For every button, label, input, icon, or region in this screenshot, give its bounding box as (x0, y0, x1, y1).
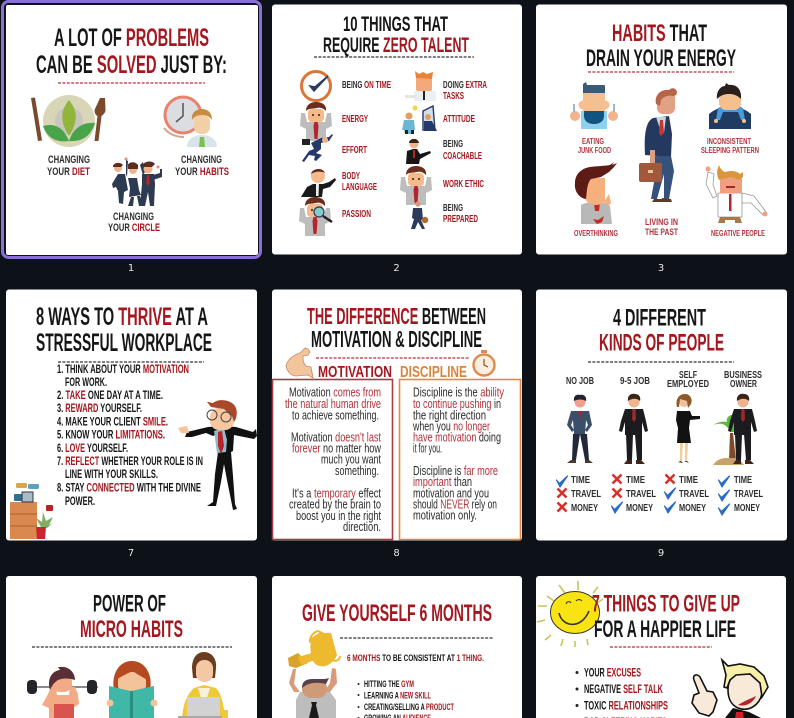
subheading: motivation: MOTIVATION (318, 364, 392, 381)
icon: clock with check (302, 72, 330, 100)
icon: clock and man (164, 97, 217, 147)
numbered list: 5. KNOW YOUR LIMITATIONS. (57, 428, 165, 442)
numbered list (57, 362, 203, 508)
icon: flexed arm (286, 348, 313, 378)
checklist: 9-5 job: MONEY (626, 503, 653, 514)
item: effort: EFFORT (342, 145, 367, 156)
numbered list: POWER. (65, 494, 95, 508)
subheading: 6 MONTHS TO BE CONSISTENT AT 1 THING. (347, 653, 484, 664)
panel 10: power of micro habits (6, 576, 257, 718)
box: motivation text: much you want (321, 451, 381, 466)
numbered list: 7. REFLECT WHETHER YOUR ROLE IS IN (57, 454, 203, 468)
figure: no job (567, 395, 593, 463)
caption: changing your circle (108, 211, 160, 234)
box: motivation text: to achieve something. (292, 407, 379, 422)
panel 12: seven things to give up (536, 576, 786, 718)
caption: changing your diet: CHANGING (48, 154, 90, 166)
box: discipline text: the right direction (413, 407, 486, 422)
box: motivation text: forever no matter how (292, 441, 381, 456)
figure: palm tree (713, 415, 744, 465)
icon: negative people (706, 165, 768, 223)
bullet list: TOXIC RELATIONSHIPS (584, 698, 668, 712)
box: motivation text: boost you in the right (296, 508, 381, 523)
panel 2: ten things that require zero talent (272, 4, 522, 254)
heading: 4 DIFFERENT (613, 305, 706, 332)
caption: changing your circle: CHANGING (113, 211, 154, 223)
page number 8: 8 (393, 548, 400, 559)
box: motivation text: It's a temporary effect (292, 485, 381, 500)
heading (592, 591, 740, 643)
box: motivation text: Motivation doesn't last (291, 429, 381, 444)
caption: overthinking: OVERTHINKING (574, 228, 618, 238)
checklist: no job (556, 475, 601, 514)
heading: 10 THINGS THAT (343, 13, 448, 36)
numbered list: 6. LOVE YOURSELF. (57, 441, 128, 455)
bullet list: NEGATIVE SELF TALK (584, 682, 663, 696)
caption: inconsistent sleeping pattern: SLEEPING PATTERN (701, 146, 759, 155)
numbered list: 4. MAKE YOUR CLIENT SMILE. (57, 414, 168, 428)
icon: extra tasks (405, 71, 436, 101)
heading (586, 20, 736, 72)
caption: changing your habits: YOUR HABITS (175, 166, 229, 178)
box: discipline text: motivation and you (413, 485, 489, 500)
numbered list: LINE WITH YOUR SKILLS. (65, 467, 158, 481)
icon: prepared man (411, 201, 428, 229)
box: motivation text: Motivation comes from (289, 385, 381, 400)
icon: businessman with glasses (178, 400, 257, 510)
item: body language: BODY (342, 171, 360, 182)
item: being prepared (443, 203, 478, 225)
item: work ethic: WORK ETHIC (443, 179, 484, 190)
checklist: business owner: TIME (734, 475, 752, 486)
box: discipline text: it for you. (413, 441, 442, 456)
caption: negative people: NEGATIVE PEOPLE (711, 228, 765, 238)
caption: changing your diet (47, 154, 90, 178)
item: attitude: ATTITUDE (443, 114, 475, 125)
numbered list: 1. THINK ABOUT YOUR MOTIVATION (57, 362, 189, 376)
caption: inconsistent sleeping pattern: INCONSISTENT (707, 137, 751, 146)
checklist: no job: TRAVEL (571, 489, 601, 500)
icon: man holding trophy (288, 631, 340, 718)
bullet list: LEARNING A NEW SKILL (364, 690, 431, 700)
column headers (566, 370, 762, 390)
page number 3: 3 (658, 263, 664, 274)
bullet list (358, 679, 454, 718)
column headers: BUSINESS (724, 370, 762, 381)
checklist: 9-5 job (612, 474, 656, 514)
subheading: discipline: DISCIPLINE (400, 364, 467, 381)
checklist: self employed: TIME (679, 475, 698, 486)
icon: eating junk food (570, 82, 618, 129)
page number 1: 1 (128, 263, 134, 274)
heading (307, 303, 486, 352)
box: discipline text: should NEVER rely on (413, 496, 497, 511)
heading (36, 24, 227, 79)
checklist: business owner: TRAVEL (734, 489, 763, 500)
panel 11: give yourself six months (272, 576, 522, 718)
icon: energy (300, 102, 332, 141)
page number 2: 2 (393, 263, 400, 274)
heading: A LOT OF PROBLEMS (54, 24, 209, 52)
icon: stopwatch (474, 350, 494, 376)
box: discipline text: important than (413, 474, 472, 489)
bullet list: YOUR EXCUSES (584, 666, 641, 680)
caption: eating junk food (578, 137, 611, 155)
item: passion: PASSION (342, 209, 371, 220)
column headers: EMPLOYED (667, 379, 709, 390)
icon: woman lifting barbell (27, 667, 98, 718)
caption: changing your habits: CHANGING (181, 154, 222, 166)
heading: REQUIRE ZERO TALENT (323, 34, 469, 57)
caption: living in the past: LIVING IN (645, 217, 678, 228)
icon: overthinking (575, 162, 617, 224)
numbered list: 2. TAKE ONE DAY AT A TIME. (57, 388, 163, 402)
heading: MICRO HABITS (80, 616, 183, 643)
icon: desk with plant (10, 483, 53, 539)
icon: plate with leaves (31, 95, 106, 147)
caption: changing your diet: YOUR DIET (47, 166, 90, 178)
item: body language: LANGUAGE (342, 182, 377, 193)
checklist: no job: TIME (571, 475, 590, 486)
heading (36, 303, 212, 357)
item: doing extra tasks: TASKS (443, 91, 464, 102)
heading: 8 WAYS TO THRIVE AT A (36, 303, 208, 331)
checklist: no job: MONEY (571, 503, 598, 514)
checklist: business owner (718, 475, 763, 515)
item: doing extra tasks: DOING EXTRA (443, 80, 487, 91)
item: being coachable: BEING (443, 139, 463, 150)
panel 1: problems solved by (2, 2, 260, 258)
box: discipline text: when you no longer (412, 419, 490, 434)
bullet list: HITTING THE GYM (364, 679, 414, 689)
item: being coachable (443, 139, 482, 162)
icon: girl reading book (106, 661, 158, 718)
caption: living in the past (645, 217, 678, 238)
icon: smiling sun (537, 581, 603, 647)
column headers: 9-5 JOB (620, 376, 650, 387)
figure: business owner (728, 394, 757, 464)
checklist: 9-5 job: TRAVEL (626, 489, 656, 500)
box: discipline text: motivation only. (413, 508, 477, 523)
bullet list (576, 666, 668, 718)
icon: cartoon man pointing (692, 660, 768, 718)
checklist: self employed (664, 474, 709, 514)
checklist: self employed: TRAVEL (679, 489, 709, 500)
box: motivation text (272, 380, 392, 540)
heading: POWER OF (93, 591, 166, 618)
panel 9: four kinds of people (536, 290, 787, 540)
figure: 9-5 job (619, 394, 648, 464)
icon: woman on laptop (178, 652, 228, 718)
checklist: business owner: MONEY (734, 503, 760, 514)
box: discipline text: to continue pushing in (413, 396, 501, 411)
panel 8: motivation vs discipline (272, 290, 522, 540)
icon: passion magnifier (299, 197, 332, 236)
numbered list: 3. REWARD YOURSELF. (57, 401, 142, 415)
box: discipline text (400, 380, 520, 540)
item: being on time: BEING ON TIME (342, 80, 391, 91)
caption: changing your circle: YOUR CIRCLE (108, 222, 160, 234)
box: motivation text: something. (335, 463, 379, 478)
panel 7: eight ways to thrive (6, 290, 257, 540)
icon: three dancing colleagues (112, 158, 162, 206)
checklist: self employed: MONEY (679, 503, 706, 514)
page number 9: 9 (658, 548, 664, 559)
icon: body language (301, 169, 336, 197)
heading (80, 591, 183, 643)
numbered list: 8. STAY CONNECTED WITH THE DIVINE (57, 480, 201, 494)
item: being coachable: COACHABLE (443, 151, 482, 162)
heading (323, 13, 469, 57)
heading: HABITS THAT (612, 20, 707, 47)
heading (599, 305, 724, 357)
box: discipline text: Discipline is the ability (413, 385, 504, 400)
box: discipline text: Discipline is far more (413, 463, 498, 478)
box: discipline text: have motivation doing (413, 429, 501, 444)
icon: attitude and mirror (402, 106, 437, 134)
box: motivation text: created by the brain to (289, 497, 381, 512)
page number 7: 7 (128, 548, 134, 559)
column headers: OWNER (730, 379, 758, 390)
caption: inconsistent sleeping pattern (701, 137, 759, 155)
column headers: SELF (679, 370, 697, 381)
heading: THE DIFFERENCE BETWEEN (307, 303, 486, 329)
column headers: NO JOB (566, 376, 594, 387)
item: being prepared: BEING (443, 203, 463, 214)
item: body language (342, 171, 377, 193)
icon: work ethic (400, 166, 432, 205)
icon: coachable man (406, 139, 431, 164)
caption: living in the past: THE PAST (645, 227, 678, 238)
caption: eating junk food: JUNK FOOD (578, 146, 611, 155)
heading: STRESSFUL WORKPLACE (36, 329, 212, 357)
checklist: 9-5 job: TIME (626, 475, 645, 486)
item: being prepared: PREPARED (443, 214, 478, 225)
item: doing extra tasks (443, 80, 487, 102)
box: motivation text: direction. (343, 519, 381, 534)
box: motivation text: the natural human drive (285, 396, 381, 411)
icon: running man (302, 134, 333, 162)
icon: tired man with briefcase (639, 88, 677, 202)
panel 3: habits that drain your energy (536, 4, 787, 254)
icon: inconsistent sleeping (709, 83, 751, 129)
caption: changing your habits (175, 154, 229, 178)
item: energy: ENERGY (342, 114, 368, 125)
bullet list: CREATING/SELLING A PRODUCT (364, 702, 454, 712)
heading: MOTIVATION & DISCIPLINE (311, 326, 482, 352)
numbered list: FOR WORK. (65, 375, 107, 389)
caption: eating junk food: EATING (582, 137, 604, 146)
heading: GIVE YOURSELF 6 MONTHS (302, 600, 492, 627)
heading: CAN BE SOLVED JUST BY: (36, 51, 227, 79)
figure: self employed (676, 394, 700, 463)
